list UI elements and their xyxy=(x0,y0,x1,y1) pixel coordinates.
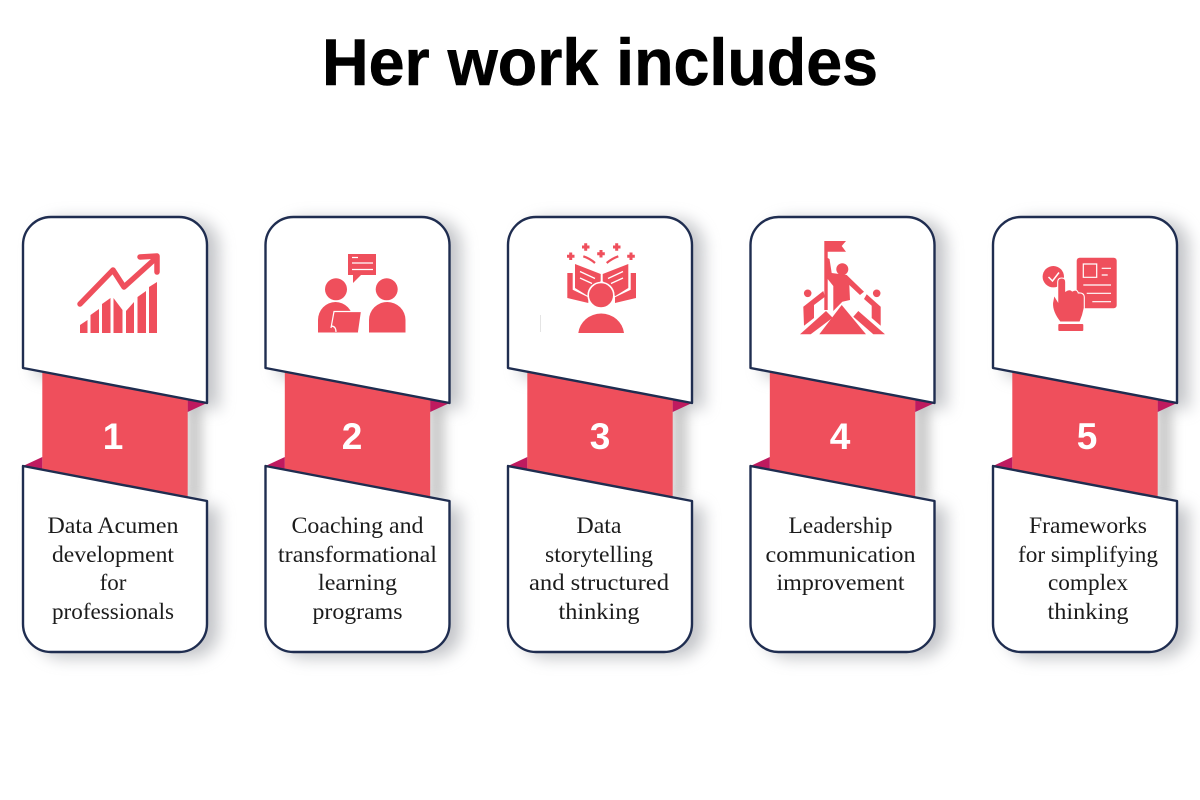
icon: hand tapping document xyxy=(1043,258,1117,331)
text: card 5: for simplifying xyxy=(1018,542,1158,567)
text: card 5: Frameworks xyxy=(1029,513,1147,538)
number 1: 1 xyxy=(103,416,123,457)
panel: card 4 leadership xyxy=(750,217,946,658)
text: card 4: communication xyxy=(766,542,916,567)
text: card 5: thinking xyxy=(1048,599,1129,624)
text: card 4: improvement xyxy=(776,570,905,595)
number 3: 3 xyxy=(590,416,610,457)
text: card 1: for xyxy=(100,570,127,595)
number band xyxy=(508,371,692,497)
title: Her work includes xyxy=(322,25,878,99)
text: card 3: thinking xyxy=(558,599,640,624)
text: card 1: Data Acumen xyxy=(48,513,179,538)
icon: two people talking xyxy=(318,254,406,332)
icon: reader with open book xyxy=(540,243,636,333)
text: card 4: Leadership xyxy=(788,513,892,538)
icon: rising chart with arrow xyxy=(80,256,157,333)
text: card 2: learning xyxy=(318,570,398,595)
number band xyxy=(993,371,1177,497)
number band xyxy=(266,371,450,497)
number 4: 4 xyxy=(830,416,851,457)
text: card 3: storytelling xyxy=(545,542,654,567)
text: card 2: transformational xyxy=(278,542,437,567)
panel: card 2 coaching xyxy=(266,217,462,658)
panel: card 1 data acumen xyxy=(23,217,219,658)
panel: card 3 data storytelling xyxy=(508,217,704,658)
text: card 3: Data xyxy=(576,513,622,538)
text: card 1: professionals xyxy=(52,599,174,624)
text: card 2: Coaching and xyxy=(292,513,424,538)
text: card 3: and structured xyxy=(529,570,670,595)
panel: card 5 frameworks xyxy=(993,217,1189,658)
number band xyxy=(750,371,934,497)
text: card 1: development xyxy=(52,542,175,567)
number 5: 5 xyxy=(1077,416,1097,457)
number band xyxy=(23,371,207,497)
text: card 2: programs xyxy=(312,599,403,624)
icon: leader with flag on mountain xyxy=(800,241,885,334)
number 2: 2 xyxy=(342,416,362,457)
text: card 5: complex xyxy=(1048,570,1128,595)
